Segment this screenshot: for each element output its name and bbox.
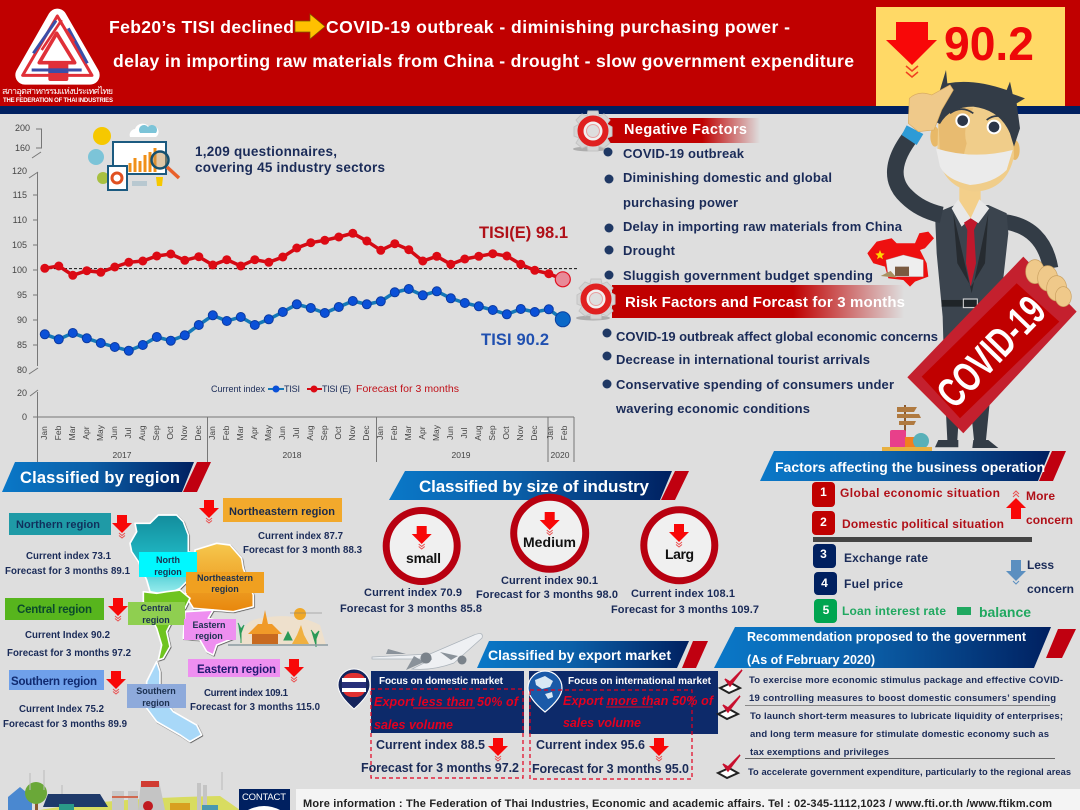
factor badges: 3 [820, 547, 827, 561]
month labels: Jan [39, 426, 49, 440]
map label: eastern: region [195, 631, 223, 641]
icon: Thai flag pin [338, 669, 370, 709]
icon: arrow [295, 14, 325, 39]
illustration: airplane [372, 634, 482, 670]
map label: southern: Southern [136, 686, 176, 696]
series: TISI [45, 289, 563, 351]
icon: down arrow [649, 738, 669, 761]
month labels: Apr [81, 426, 91, 440]
axis labels: 115 [13, 190, 27, 200]
bullet list: Diminishing domestic and global [623, 170, 832, 185]
survey note: 1,209 questionnaires, [195, 144, 337, 159]
factor labels: Domestic political situation [842, 517, 1004, 531]
factor badges: 1 [820, 485, 827, 499]
panel: southern region: Southern region [11, 676, 97, 688]
month labels: May [95, 424, 105, 441]
wrist band [902, 125, 923, 145]
map of Thailand [130, 515, 253, 742]
bullet list: Decrease in international tourist arrivals [616, 352, 870, 367]
panel: northeastern region: Forecast for 3 month 88.3 [243, 545, 363, 556]
axis labels: 20 [17, 388, 27, 398]
legend [211, 383, 459, 395]
heading: risk factors [576, 279, 905, 320]
panel: northern region: Current index 73.1 [26, 551, 112, 562]
panel: international market: Current index 95.6 [536, 738, 645, 752]
map label: central: Central [140, 603, 172, 613]
month labels: Sep [319, 425, 329, 441]
factor labels: balance [979, 604, 1031, 620]
month labels: Dec [193, 425, 203, 441]
icon: checkmark [718, 755, 740, 778]
panel: domestic market: sales volume [374, 718, 453, 732]
logo: Federation of Thai Industries [2, 16, 113, 104]
month labels [39, 424, 570, 460]
panel: northern region [5, 513, 132, 577]
icon: down arrow [284, 659, 304, 682]
ribbon: factors [760, 451, 1066, 481]
panel: northeastern region [199, 498, 363, 556]
logo: Federation of Thai Industries: สภาอุตสาหกรรมแห่งประเทศไทย [2, 86, 113, 97]
panel: northern region: Forecast for 3 months 89.1 [5, 566, 131, 577]
icon: down arrow [488, 738, 508, 761]
month labels: Mar [235, 426, 245, 440]
illustration: temple scene [228, 608, 328, 647]
panel: northeastern region: Northeastern region [229, 506, 335, 518]
bullet list: Drought [623, 243, 676, 258]
face mask [936, 148, 1013, 185]
axis labels: 100 [12, 265, 27, 275]
map label: central: region [142, 615, 170, 625]
legend: TISI [284, 384, 300, 394]
map label: southern: region [142, 698, 170, 708]
legend: more concern [1006, 489, 1073, 527]
map label: north: region [154, 567, 182, 577]
panel: northern region: Northern region [16, 519, 100, 531]
raised hand [908, 85, 953, 132]
panel: small industry: Current index 70.9 [364, 587, 462, 599]
factor labels: Global economic situation [840, 486, 1000, 500]
eyes [955, 113, 970, 128]
ribbon: recommendation: Recommendation proposed to the government [747, 630, 1027, 644]
gripping hand [1026, 260, 1071, 307]
axis labels: 200 [15, 123, 30, 133]
headline: Feb20’s TISI declined [109, 17, 294, 37]
icon: down arrow [108, 598, 128, 621]
month labels: Feb [389, 425, 399, 440]
month labels: Jan [375, 426, 385, 440]
recommendation 2: To launch short-term measures to lubricate liquidity of enterprises; [750, 711, 1063, 722]
ribbon: classified by size: Classified by size of industry [419, 477, 650, 496]
month labels: Aug [137, 425, 147, 441]
ribbon: factors: Factors affecting the business operation [775, 459, 1045, 475]
axis labels: 85 [17, 340, 27, 350]
panel: domestic market: Export less than 50% of [374, 695, 520, 709]
month labels: 2017 [113, 450, 132, 460]
month labels: Aug [473, 425, 483, 441]
panel: central region: Current Index 90.2 [25, 630, 110, 641]
panel: medium industry [476, 497, 618, 601]
footer contact info [296, 789, 1080, 810]
recommendation 2: and long term measure for stimulate domestic economy such as [750, 729, 1049, 740]
logo: Federation of Thai Industries: THE FEDERATION OF THAI INDUSTRIES [3, 98, 113, 104]
bullet list: wavering economic conditions [615, 401, 810, 416]
month labels: Oct [501, 426, 511, 440]
ribbon: classified by size [389, 471, 689, 500]
panel: central region: Central region [17, 604, 92, 616]
ribbon: classified by export market: Classified by export market [488, 647, 671, 663]
month labels: 2019 [452, 450, 471, 460]
panel: large industry [611, 510, 759, 616]
factor labels [840, 486, 1031, 620]
map label: central [128, 602, 185, 625]
ribbon: classified by region [2, 462, 211, 492]
month labels: Apr [417, 426, 427, 440]
ribbon: classified by region: Classified by region [20, 469, 180, 487]
ribbon: classified by export market [477, 641, 708, 668]
icon: down arrow [112, 515, 132, 538]
panel: northeastern region: Current index 87.7 [258, 531, 343, 542]
month labels: Mar [67, 426, 77, 440]
month labels: Mar [403, 426, 413, 440]
line chart: TISI [12, 123, 578, 462]
month labels: Jul [123, 427, 133, 438]
map label: eastern [184, 619, 236, 641]
hair [935, 70, 1025, 147]
panel: small industry: small [406, 550, 441, 566]
recommendation 2: tax exemptions and privileges [750, 747, 889, 758]
icon: globe pin [528, 671, 562, 712]
month labels: May [431, 424, 441, 441]
jacket [935, 205, 1008, 400]
recommendation 1: To exercise more economic stimulus package and effective COVID- [749, 675, 1063, 686]
survey note [195, 144, 385, 175]
panel: domestic market [338, 669, 524, 778]
factor labels: Exchange rate [844, 551, 928, 565]
panel: central region: Forecast for 3 months 97.2 [7, 648, 131, 659]
callout: TISI(E): TISI(E) 98.1 [479, 224, 568, 242]
axis labels: 95 [17, 290, 27, 300]
panel: southern region [3, 670, 128, 730]
icon: checkmark [718, 696, 740, 719]
survey note: covering 45 industry sectors [195, 160, 385, 175]
legend: less concern [1006, 558, 1074, 596]
panel: medium industry: Forecast for 3 months 98.0 [476, 589, 618, 601]
month labels: Sep [151, 425, 161, 441]
panel: large industry: Forecast for 3 months 109.7 [611, 604, 759, 616]
month labels: Jun [109, 426, 119, 440]
panel: international market: Forecast for 3 months 95.0 [532, 762, 689, 776]
icon: analytics illustration [88, 124, 179, 190]
illustration: industrial skyline [8, 770, 240, 810]
month labels: Oct [165, 426, 175, 440]
month labels: Feb [559, 425, 569, 440]
axis labels: 120 [12, 166, 27, 176]
panel: medium industry: Current index 90.1 [501, 575, 598, 587]
map label: north [139, 552, 197, 577]
legend: Current index [211, 384, 266, 394]
month labels: Nov [515, 425, 525, 441]
axes [29, 129, 574, 462]
month labels: Jul [291, 427, 301, 438]
shoes [935, 440, 998, 448]
belt [942, 300, 978, 307]
panel: recommendation [714, 627, 1076, 778]
footer contact info: More information : The Federation of Thai Industries, Economic and academic affairs. Tel : 02-345-1112,1023 / www.fti.or.th /www.ftikm.com [303, 798, 1052, 810]
icon: travel luggage and signpost [882, 405, 932, 453]
bullet list: purchasing power [623, 195, 738, 210]
panel: central region [5, 598, 131, 659]
legend: less concern: concern [1027, 582, 1074, 596]
month labels: Feb [221, 425, 231, 440]
month labels: Dec [361, 425, 371, 441]
legend: more concern: concern [1026, 513, 1073, 527]
header banner [0, 0, 1080, 114]
sign [907, 257, 1077, 433]
axis labels [12, 123, 30, 422]
illustration: businessman holding COVID-19 sign [895, 70, 1077, 448]
headline index box: 90.2 [944, 17, 1034, 70]
month labels: Jan [545, 426, 555, 440]
factor badges: 4 [821, 576, 828, 590]
month labels: Nov [179, 425, 189, 441]
month labels: Jun [277, 426, 287, 440]
bullet list: Delay in importing raw materials from China [623, 219, 903, 234]
month labels: Dec [529, 425, 539, 441]
map label: southern [127, 684, 186, 708]
callout: TISI: TISI 90.2 [481, 331, 549, 349]
panel: eastern region: Forecast for 3 months 115.0 [190, 702, 320, 713]
panel: international market [528, 671, 718, 779]
panel: domestic market: Current index 88.5 [376, 738, 485, 752]
bullet list: Conservative spending of consumers under [616, 377, 894, 392]
recommendation 2 [750, 711, 1063, 758]
panel: eastern region: Eastern region [197, 664, 276, 676]
legend: TISI (E) [322, 384, 351, 394]
axis labels: 160 [15, 143, 30, 153]
bullet list: Sluggish government budget spending [623, 268, 873, 283]
icon: China map with warehouse [867, 232, 934, 287]
icon: down arrow [199, 500, 219, 523]
month labels: Oct [333, 426, 343, 440]
contact tag [239, 789, 290, 810]
panel: large industry: Current index 108.1 [631, 588, 735, 600]
factor badges: 5 [823, 603, 830, 617]
panel: negative factors [573, 111, 903, 283]
map label: northeastern: region [211, 584, 239, 594]
factor labels: Fuel price [844, 577, 903, 591]
month labels: 2018 [283, 450, 302, 460]
recommendation 1 [749, 675, 1063, 704]
panel: southern region: Forecast for 3 months 89.9 [3, 719, 128, 730]
icon: checkmark [720, 670, 742, 693]
panel: factors affecting business [760, 451, 1074, 623]
month labels: Apr [249, 426, 259, 440]
map label: north: North [156, 555, 180, 565]
month labels: Nov [347, 425, 357, 441]
map label: northeastern [186, 572, 264, 594]
legend: Forecast for 3 months [356, 383, 459, 395]
tie [964, 218, 977, 287]
panel: risk factors [576, 279, 938, 416]
contact tag: CONTACT [242, 792, 286, 803]
heading: negative factors [573, 111, 760, 152]
recommendation 1: 19 controlling measures to boost domestic consumers’ spending [749, 693, 1056, 704]
headline: delay in importing raw materials from China - drought - slow government expenditure [113, 51, 854, 71]
axis labels: 110 [13, 215, 27, 225]
panel: international market: Export more than 50% of [563, 694, 715, 708]
map label: northeastern: Northeastern [197, 573, 253, 583]
panel: eastern region: Current index 109.1 [204, 688, 289, 699]
headline [109, 14, 854, 71]
recommendation 3: To accelerate government expenditure, particularly to the regional areas [748, 767, 1071, 777]
ribbon: recommendation: (As of February 2020) [747, 653, 875, 667]
legs [945, 393, 991, 440]
month labels: May [263, 424, 273, 441]
panel: small industry [340, 510, 482, 615]
neck and collar [959, 187, 981, 220]
month labels: Jul [459, 427, 469, 438]
axis labels: 90 [17, 315, 27, 325]
bullet list: COVID-19 outbreak affect global economic concerns [616, 329, 938, 344]
right arm [1003, 222, 1051, 268]
heading: risk factors: Risk Factors and Forcast for 3 months [625, 294, 905, 311]
panel: international market: Focus on international market [568, 676, 712, 687]
bullet list: COVID-19 outbreak [623, 146, 745, 161]
axis labels: 80 [17, 365, 27, 375]
panel: eastern region [188, 659, 320, 713]
heading: negative factors: Negative Factors [624, 122, 747, 138]
factor badges [812, 482, 1032, 623]
bullet list [602, 328, 938, 416]
map label: eastern: Eastern [192, 620, 226, 630]
panel: small industry: Forecast for 3 months 85.8 [340, 603, 482, 615]
month labels: Sep [487, 425, 497, 441]
panel: domestic market: Forecast for 3 months 97.2 [361, 761, 519, 775]
legend: more concern: More [1026, 489, 1055, 503]
panel: international market: sales volume [563, 716, 641, 730]
panel: medium industry: Medium [523, 534, 576, 550]
series: TISI(E) [45, 233, 563, 279]
axis labels: 0 [22, 412, 27, 422]
factor badges: 2 [820, 515, 827, 529]
month labels: Jan [207, 426, 217, 440]
headline index box [876, 7, 1065, 106]
panel: southern region: Current Index 75.2 [19, 704, 104, 715]
headline: COVID-19 outbreak - diminishing purchasing power - [326, 17, 790, 37]
month labels: Aug [305, 425, 315, 441]
ribbon: recommendation [714, 627, 1076, 668]
head [930, 127, 940, 147]
month labels: Jun [445, 426, 455, 440]
icon: down arrow [106, 671, 126, 694]
axis labels: 105 [12, 240, 27, 250]
bullet list [604, 146, 903, 283]
panel: large industry: Larg [665, 546, 694, 562]
month labels: Feb [53, 425, 63, 440]
legend: less concern: Less [1027, 558, 1054, 572]
raised arm [895, 135, 942, 215]
panel: domestic market: Focus on domestic market [379, 676, 504, 687]
month labels: 2020 [551, 450, 570, 460]
factor labels: Loan interest rate [842, 604, 946, 618]
